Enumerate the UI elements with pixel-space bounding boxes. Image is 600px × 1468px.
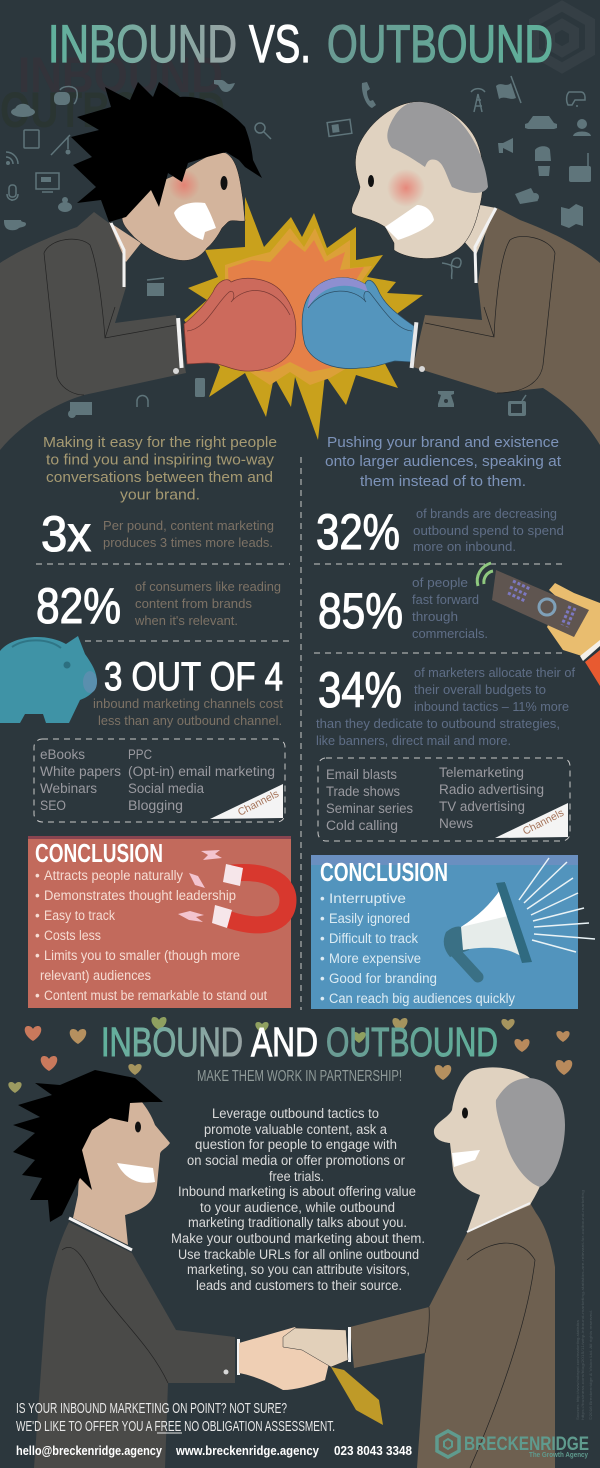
partnership body text: Leverage outbound tactics to <box>212 1106 379 1121</box>
panel: inbound conclusion: Easy to track <box>44 908 115 923</box>
panel: outbound conclusion: Easily ignored <box>329 911 410 926</box>
stat: 34%: of marketers allocate their of <box>414 665 575 680</box>
stat: 32%: of brands are decreasing <box>416 506 557 521</box>
stat: 85%: through <box>412 609 458 624</box>
intro: inbound: your brand. <box>120 486 200 504</box>
panel: inbound channels: White papers <box>40 764 121 779</box>
stat: 85%: fast forward <box>412 592 479 607</box>
right man shirt collar <box>475 208 496 283</box>
remote keypad <box>508 581 575 627</box>
eye <box>135 1122 141 1132</box>
smile <box>117 1163 155 1183</box>
title: INBOUND <box>48 15 237 74</box>
remote dial <box>539 599 555 615</box>
icon: chat bubbles <box>54 86 77 105</box>
left man button <box>173 368 179 374</box>
partnership body text: marketing, so you can attribute visitors, <box>187 1262 410 1277</box>
panel: inbound conclusion: • <box>35 988 40 1003</box>
left man cuff <box>176 318 184 368</box>
ghosted title echo <box>0 47 225 138</box>
call to action: WE'D LIKE TO OFFER YOU A FREE NO OBLIGATION ASSESSMENT. <box>16 1418 335 1435</box>
left man suit outlines <box>44 239 176 395</box>
stat: 3 out of 4: less than any outbound channel. <box>98 713 282 728</box>
left man suit <box>0 212 186 450</box>
panel: inbound channels: SEO <box>40 798 66 813</box>
icon: magnifier <box>255 123 271 139</box>
button <box>224 1370 228 1374</box>
panel: inbound conclusion: • <box>35 908 40 923</box>
icon: envelope with clock <box>515 188 539 204</box>
stat: 3x: 3x <box>41 506 91 562</box>
stat: 85% <box>318 575 488 641</box>
panel: inbound conclusion: • <box>35 928 40 943</box>
panel: inbound channels: eBooks <box>40 747 85 762</box>
channels tag: Channels <box>521 807 566 838</box>
partnership body text: to your audience, while outbound <box>200 1200 395 1215</box>
intro: inbound: conversations between them and <box>46 469 273 486</box>
right man suit outlines <box>425 236 555 393</box>
panel: outbound channels: Cold calling <box>326 818 398 833</box>
panel: inbound conclusion: • <box>35 948 40 963</box>
sources fine print: https://business.com/blog/2015/11/why-inbound-marketing-statistics-are-relevant-for-outbound-marketing <box>581 1190 585 1420</box>
panel: inbound channels: (Opt-in) email marketing <box>128 764 275 779</box>
suit <box>34 1222 235 1468</box>
heading: inbound and outbound: AND <box>251 1019 318 1065</box>
icon: car <box>525 116 557 129</box>
partnership body text: on social media or offer promotions or <box>187 1153 405 1168</box>
icon: monitor <box>36 173 59 192</box>
icon: newspaper <box>327 119 352 136</box>
hearts decoration <box>8 1017 572 1093</box>
face and neck <box>434 1067 552 1232</box>
icon: magnet <box>178 850 288 928</box>
stat: 32% <box>316 504 564 560</box>
cuff <box>580 640 600 661</box>
partnership body text: Inbound marketing is about offering value <box>178 1184 416 1199</box>
contact details: 023 8043 3348 <box>334 1443 412 1458</box>
explosion outer star <box>184 197 423 440</box>
panel: inbound channels: PPC <box>128 747 152 762</box>
stat: 34%: inbound tactics – 11% more <box>414 699 569 714</box>
hair <box>13 1070 163 1222</box>
partnership body text: marketing traditionally talks about you. <box>188 1215 407 1230</box>
panel: outbound channels: Radio advertising <box>439 782 544 797</box>
stat: 85%: 85% <box>318 583 403 639</box>
central dashed divider <box>300 457 302 1010</box>
stat: 34%: than they dedicate to outbound strategies, <box>316 716 560 731</box>
panel: outbound conclusion: More expensive <box>329 951 421 966</box>
cuff <box>237 1339 240 1375</box>
panel: inbound conclusion: Content must be remarkable to stand out <box>44 988 267 1003</box>
left man: smiling <box>13 1070 240 1468</box>
contact details: www.breckenridge.agency <box>175 1443 320 1458</box>
icon: telephone <box>438 391 454 407</box>
icon: clapperboard <box>147 278 164 296</box>
intro: inbound: Making it easy for the right people <box>43 434 277 451</box>
icon: megaphone <box>444 858 595 977</box>
panel: outbound conclusion: Interruptive <box>329 891 406 906</box>
icon: map <box>561 204 583 228</box>
heading: inbound and outbound: OUTBOUND <box>326 1019 498 1065</box>
panel: outbound channels: News <box>439 816 473 831</box>
Breckenridge logo: The Growth Agency <box>529 1452 588 1459</box>
icon: ear <box>442 258 461 279</box>
panel: inbound conclusion: CONCLUSION <box>35 838 163 868</box>
partnership body text: promote valuable content, ask a <box>204 1122 387 1137</box>
heading: inbound and outbound: INBOUND <box>101 1019 243 1065</box>
heading: inbound and outbound <box>101 1019 498 1065</box>
intro: outbound <box>325 434 562 490</box>
stat: 34%: 34% <box>318 662 402 718</box>
icon: microphone <box>7 185 18 201</box>
panel: outbound conclusion: Can reach big audiences quickly <box>329 991 515 1006</box>
partnership body text: free trials. <box>269 1169 324 1184</box>
call to action: IS YOUR INBOUND MARKETING ON POINT? NOT SURE? <box>16 1400 287 1417</box>
stat: 82%: when it's relevant. <box>134 613 238 628</box>
channels tag <box>210 784 283 819</box>
intro: inbound: to find you and inspiring two-way <box>46 452 275 468</box>
sparks <box>178 850 222 922</box>
collar <box>467 1203 530 1232</box>
smile <box>452 1150 480 1167</box>
stat: 85%: commercials. <box>412 626 488 641</box>
stat: 3x: produces 3 times more leads. <box>103 535 273 550</box>
Breckenridge logo <box>437 1431 589 1459</box>
icon: radio tower <box>471 89 485 112</box>
stat: 82%: 82% <box>36 578 121 634</box>
sleeve <box>585 650 600 686</box>
contact details: hello@breckenridge.agency <box>16 1443 163 1458</box>
hand <box>547 583 600 657</box>
logo hexagon <box>437 1431 459 1457</box>
panel: inbound conclusion: relevant) audiences <box>40 968 151 983</box>
right man eye <box>368 175 374 187</box>
panel: inbound conclusion: Limits you to smaller (though more <box>44 948 240 963</box>
icon: agent <box>573 119 591 136</box>
intro: outbound: onto larger audiences, speaking at <box>325 453 562 470</box>
remote <box>492 570 589 637</box>
channels tag: Channels <box>236 788 281 819</box>
stat: 32%: more on inbound. <box>413 539 516 554</box>
stat: 32%: outbound spend to spend <box>413 523 564 538</box>
panel: outbound channels: Seminar series <box>326 801 413 816</box>
suit outlines <box>425 1243 535 1468</box>
left man shirt collar <box>111 223 124 287</box>
partnership body text: leads and customers to their source. <box>196 1278 402 1293</box>
panel: outbound conclusion: Difficult to track <box>329 931 418 946</box>
panel: outbound conclusion: Good for branding <box>329 971 437 986</box>
ghosted title echo: INBOUND <box>18 47 223 103</box>
icon: coffee cup <box>4 220 26 230</box>
icon: bee <box>58 197 72 212</box>
right man neck <box>463 205 496 255</box>
stat: 3 out of 4 <box>93 655 283 728</box>
stat: 82% <box>36 578 281 634</box>
icon: piggy bank <box>0 636 97 723</box>
explosion middle star <box>225 228 372 385</box>
title <box>48 15 553 74</box>
sources fine print: ©2016 Breckenridge & Vision Ltd. All rights reserved. <box>589 1310 593 1420</box>
icon: envelope <box>68 402 92 418</box>
panel: outbound conclusion: • <box>320 891 325 906</box>
right man hair <box>387 102 488 193</box>
left man face <box>122 152 245 260</box>
stat: 32%: 32% <box>316 504 400 560</box>
icon: router <box>569 153 591 182</box>
left man: angry inbound character <box>0 82 262 450</box>
intro: inbound <box>43 434 277 504</box>
eye <box>462 1108 468 1118</box>
icon: mailbox <box>567 92 585 107</box>
wifi signal <box>477 563 493 586</box>
explosion <box>184 197 423 440</box>
icon: bird <box>214 80 235 92</box>
stat: 34% <box>316 662 575 748</box>
blue boxing glove <box>302 278 418 369</box>
panel: inbound channels <box>34 739 285 822</box>
suit outlines <box>62 1247 168 1383</box>
left man mouth <box>174 202 216 240</box>
stat: 3 out of 4: 3 OUT OF 4 <box>104 655 283 699</box>
explosion inner star <box>228 240 364 372</box>
panel: outbound channels <box>318 758 570 841</box>
handshake <box>239 1327 383 1425</box>
stat: 3x <box>41 506 274 562</box>
panel: outbound conclusion <box>311 855 595 1009</box>
right man mouth <box>385 205 434 240</box>
panel: outbound channels: Email blasts <box>326 767 397 782</box>
partnership body text: question for people to engage with <box>195 1137 397 1152</box>
icon: megaphone small <box>498 138 513 153</box>
panel: inbound channels: Blogging <box>128 798 183 813</box>
sources fine print <box>576 1190 593 1420</box>
sources fine print: Sources: http://www.hubspot.com/marketing-statistics <box>576 1320 580 1420</box>
panel: inbound conclusion <box>28 836 291 1008</box>
left man blush <box>168 169 200 201</box>
face and neck <box>73 1085 170 1245</box>
panel: outbound channels: Trade shows <box>326 784 400 799</box>
right man button <box>419 366 425 372</box>
title: VS. <box>249 15 311 74</box>
panel: inbound conclusion: • <box>35 868 40 883</box>
icon: old tv <box>508 395 526 416</box>
stat: 82%: of consumers like reading <box>135 579 281 594</box>
icon: flag <box>496 76 521 103</box>
background logo hexagon <box>534 6 590 68</box>
stat: 3 out of 4: inbound marketing channels cost <box>93 696 283 711</box>
icon: phone <box>362 82 376 108</box>
intro: outbound: them instead of to them. <box>360 473 526 490</box>
ghosted title echo: OUTBOUND <box>0 82 225 138</box>
stat: 82%: content from brands <box>135 596 252 611</box>
stat: 3x: Per pound, content marketing <box>103 518 274 533</box>
right man suit <box>413 208 600 445</box>
hair <box>496 1078 565 1187</box>
stat: 85%: of people <box>412 575 468 590</box>
panel: outbound channels: TV advertising <box>439 799 525 814</box>
stat: 34%: their overall budgets to <box>414 682 546 697</box>
contact details <box>16 1443 412 1458</box>
panel: inbound conclusion: • <box>35 888 40 903</box>
icon: headphones <box>137 396 148 407</box>
left man eye <box>220 176 228 190</box>
panel: outbound conclusion: • <box>320 931 325 946</box>
right man blush <box>387 169 425 207</box>
partnership body text: Use trackable URLs for all online outbound <box>178 1247 419 1262</box>
icon: hand holding remote <box>477 563 600 686</box>
left man neck <box>109 222 141 262</box>
background marketing channel icons <box>4 76 591 418</box>
panel: outbound conclusion: • <box>320 911 325 926</box>
panel: outbound channels: Telemarketing <box>439 765 524 780</box>
subheading: MAKE THEM WORK IN PARTNERSHIP! <box>197 1068 402 1085</box>
channels tag <box>495 803 568 838</box>
stat: 34%: like banners, direct mail and more. <box>316 733 511 748</box>
right man: angry outbound character <box>352 102 600 445</box>
icon: tablet <box>24 130 39 148</box>
intro: outbound: Pushing your brand and existence <box>327 434 559 451</box>
icon: mobile phone <box>195 378 205 397</box>
panel: outbound conclusion: • <box>320 991 325 1006</box>
left man hair <box>71 82 262 222</box>
panel: inbound channels: Social media <box>128 781 204 796</box>
collar <box>69 1218 132 1250</box>
panel: inbound channels: Webinars <box>40 781 97 796</box>
panel: outbound conclusion: CONCLUSION <box>320 857 448 887</box>
panel: outbound conclusion: • <box>320 951 325 966</box>
right man head <box>352 102 483 259</box>
icon: ufo <box>11 104 35 117</box>
suit <box>350 1203 555 1468</box>
cuff <box>348 1327 351 1362</box>
red boxing glove <box>184 278 296 371</box>
icon: rss <box>6 152 18 165</box>
panel: inbound conclusion: Costs less <box>44 928 101 943</box>
panel: outbound conclusion: • <box>320 971 325 986</box>
panel: inbound conclusion: Attracts people naturally <box>44 868 183 883</box>
partnership body text <box>171 1106 425 1293</box>
call to action <box>16 1400 335 1435</box>
icon: fishing rod <box>51 135 70 155</box>
right cuff overlap <box>410 322 418 368</box>
panel: inbound conclusion: Demonstrates thought leadership <box>44 888 236 903</box>
tie <box>331 1367 383 1425</box>
icon: person with beard <box>535 146 551 176</box>
right man: smiling <box>348 1067 565 1468</box>
partnership body text: Make your outbound marketing about them. <box>171 1231 425 1246</box>
